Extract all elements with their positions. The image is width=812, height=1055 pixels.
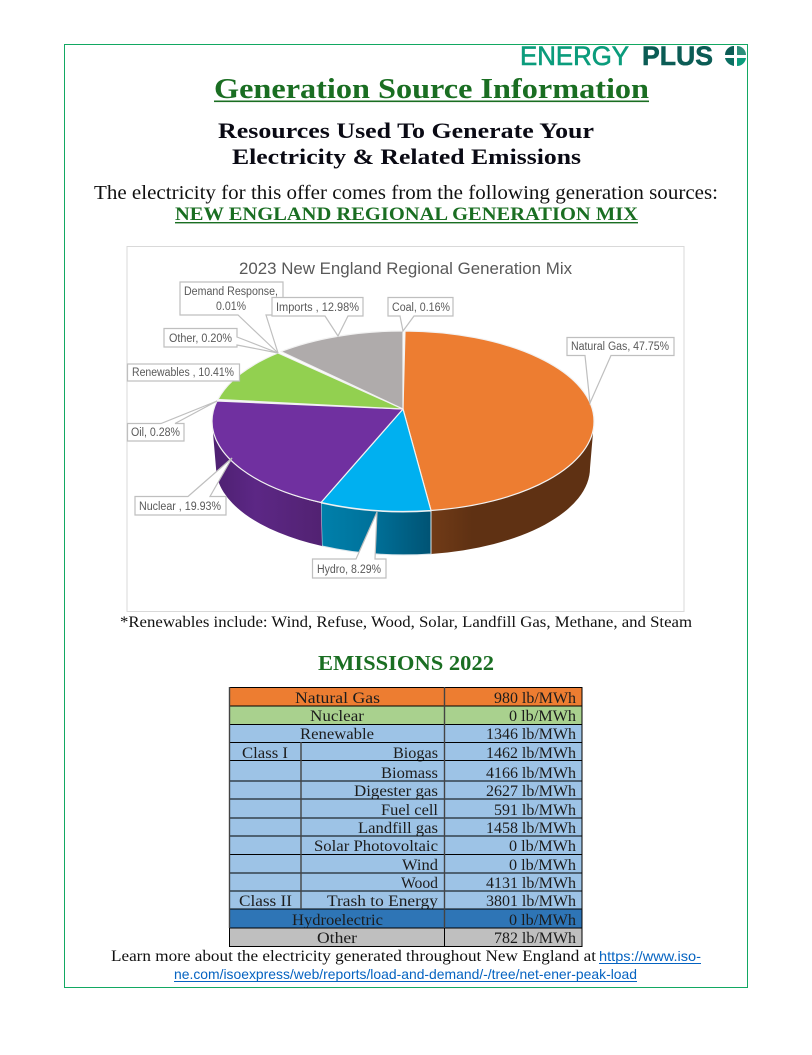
rows: renewable sources: Wind <box>402 857 438 874</box>
row: other <box>229 928 582 947</box>
logo: Energy Plus: ENERGY <box>520 41 629 71</box>
rows: renewable sources: Biomass <box>381 765 438 782</box>
label: coal: Coal, 0.16% <box>392 302 450 314</box>
intro text: The electricity for this offer comes from the following generation sources: <box>94 182 718 204</box>
renewables footnote: *Renewables include: Wind, Refuse, Wood, Solar, Landfill Gas, Methane, and Steam <box>120 614 692 631</box>
label: demand response <box>180 282 283 353</box>
panel: pie chart <box>127 246 684 612</box>
emissions heading: EMISSIONS 2022 <box>318 651 494 675</box>
row: hydroelectric: Hydroelectric <box>292 912 383 929</box>
row: natural gas <box>229 687 582 707</box>
rows: renewable sources: Biogas <box>393 745 438 762</box>
rows: renewable sources: Landfill gas <box>358 820 438 837</box>
rows: renewable sources: Fuel cell <box>381 802 438 819</box>
pie sides <box>212 421 594 555</box>
page border <box>64 44 748 988</box>
rows: renewable sources <box>229 724 582 910</box>
rows: renewable sources: Wood <box>401 875 438 892</box>
rows: renewable sources: 591 lb/MWh <box>494 802 576 819</box>
row: nuclear: Nuclear <box>310 708 365 725</box>
footer note with link: Learn more about the electricity generated throughout New England at <box>111 948 597 965</box>
label: natural gas: Natural Gas, 47.75% <box>571 341 669 353</box>
label: nuclear: Nuclear , 19.93% <box>139 501 221 513</box>
label: imports: Imports , 12.98% <box>276 302 359 314</box>
row: natural gas: 980 lb/MWh <box>494 690 576 707</box>
label: other <box>164 328 278 353</box>
label: renewables: Renewables , 10.41% <box>132 367 234 379</box>
row: hydroelectric: 0 lb/MWh <box>509 912 576 929</box>
rows: renewable sources: Trash to Energy <box>327 893 438 910</box>
rows: renewable sources: 3801 lb/MWh <box>486 893 576 910</box>
label: demand response: 0.01% <box>216 301 246 313</box>
label: coal <box>388 298 453 331</box>
rows: renewable sources: 4131 lb/MWh <box>486 875 576 892</box>
footer note with link: https://www.iso- <box>599 948 701 964</box>
pie top slices <box>212 331 594 511</box>
footer note with link <box>111 948 701 982</box>
emissions table <box>229 687 582 947</box>
label: nuclear <box>135 458 232 515</box>
label: imports <box>272 298 363 336</box>
row: nuclear <box>229 706 582 725</box>
logo: Energy Plus: PLUS <box>642 41 713 71</box>
label: other: Other, 0.20% <box>169 333 232 345</box>
rows: renewable sources: Digester gas <box>354 783 438 800</box>
label: oil: Oil, 0.28% <box>131 427 180 439</box>
row: hydroelectric <box>229 909 582 929</box>
label: demand response: Demand Response, <box>184 286 278 298</box>
title: Generation Source Information <box>214 73 649 105</box>
rows: renewable sources: Renewable <box>300 726 374 743</box>
row: other: Other <box>317 930 358 947</box>
label: renewables <box>128 364 240 381</box>
row: natural gas: Natural Gas <box>295 690 380 707</box>
rows: renewable sources: Class I <box>242 745 288 762</box>
subtitle <box>218 118 594 169</box>
logo: Energy Plus <box>520 41 746 71</box>
rows: renewable sources: 0 lb/MWh <box>509 857 576 874</box>
subtitle: Electricity & Related Emissions <box>232 144 581 169</box>
label: hydro: Hydro, 8.29% <box>317 564 381 576</box>
label: hydro <box>312 512 386 578</box>
label: oil <box>128 401 217 441</box>
rows: renewable sources: Class II <box>239 893 292 910</box>
rows: renewable sources: 1458 lb/MWh <box>486 820 576 837</box>
row: nuclear: 0 lb/MWh <box>509 708 576 725</box>
row: other: 782 lb/MWh <box>494 930 576 947</box>
rows: renewable sources: 4166 lb/MWh <box>486 765 576 782</box>
rows: renewable sources: Solar Photovoltaic <box>314 838 438 855</box>
rows: renewable sources: 1346 lb/MWh <box>486 726 576 743</box>
rows: renewable sources: 1462 lb/MWh <box>486 745 576 762</box>
rows: renewable sources: 2627 lb/MWh <box>486 783 576 800</box>
rows: renewable sources: 0 lb/MWh <box>509 838 576 855</box>
chart title: 2023 New England Regional Generation Mix <box>239 259 572 278</box>
region heading: NEW ENGLAND REGIONAL GENERATION MIX <box>175 204 638 225</box>
label: natural gas <box>567 338 674 403</box>
footer note with link: ne.com/isoexpress/web/reports/load-and-demand/-/tree/net-ener-peak-load <box>174 966 637 982</box>
subtitle: Resources Used To Generate Your <box>218 118 594 143</box>
